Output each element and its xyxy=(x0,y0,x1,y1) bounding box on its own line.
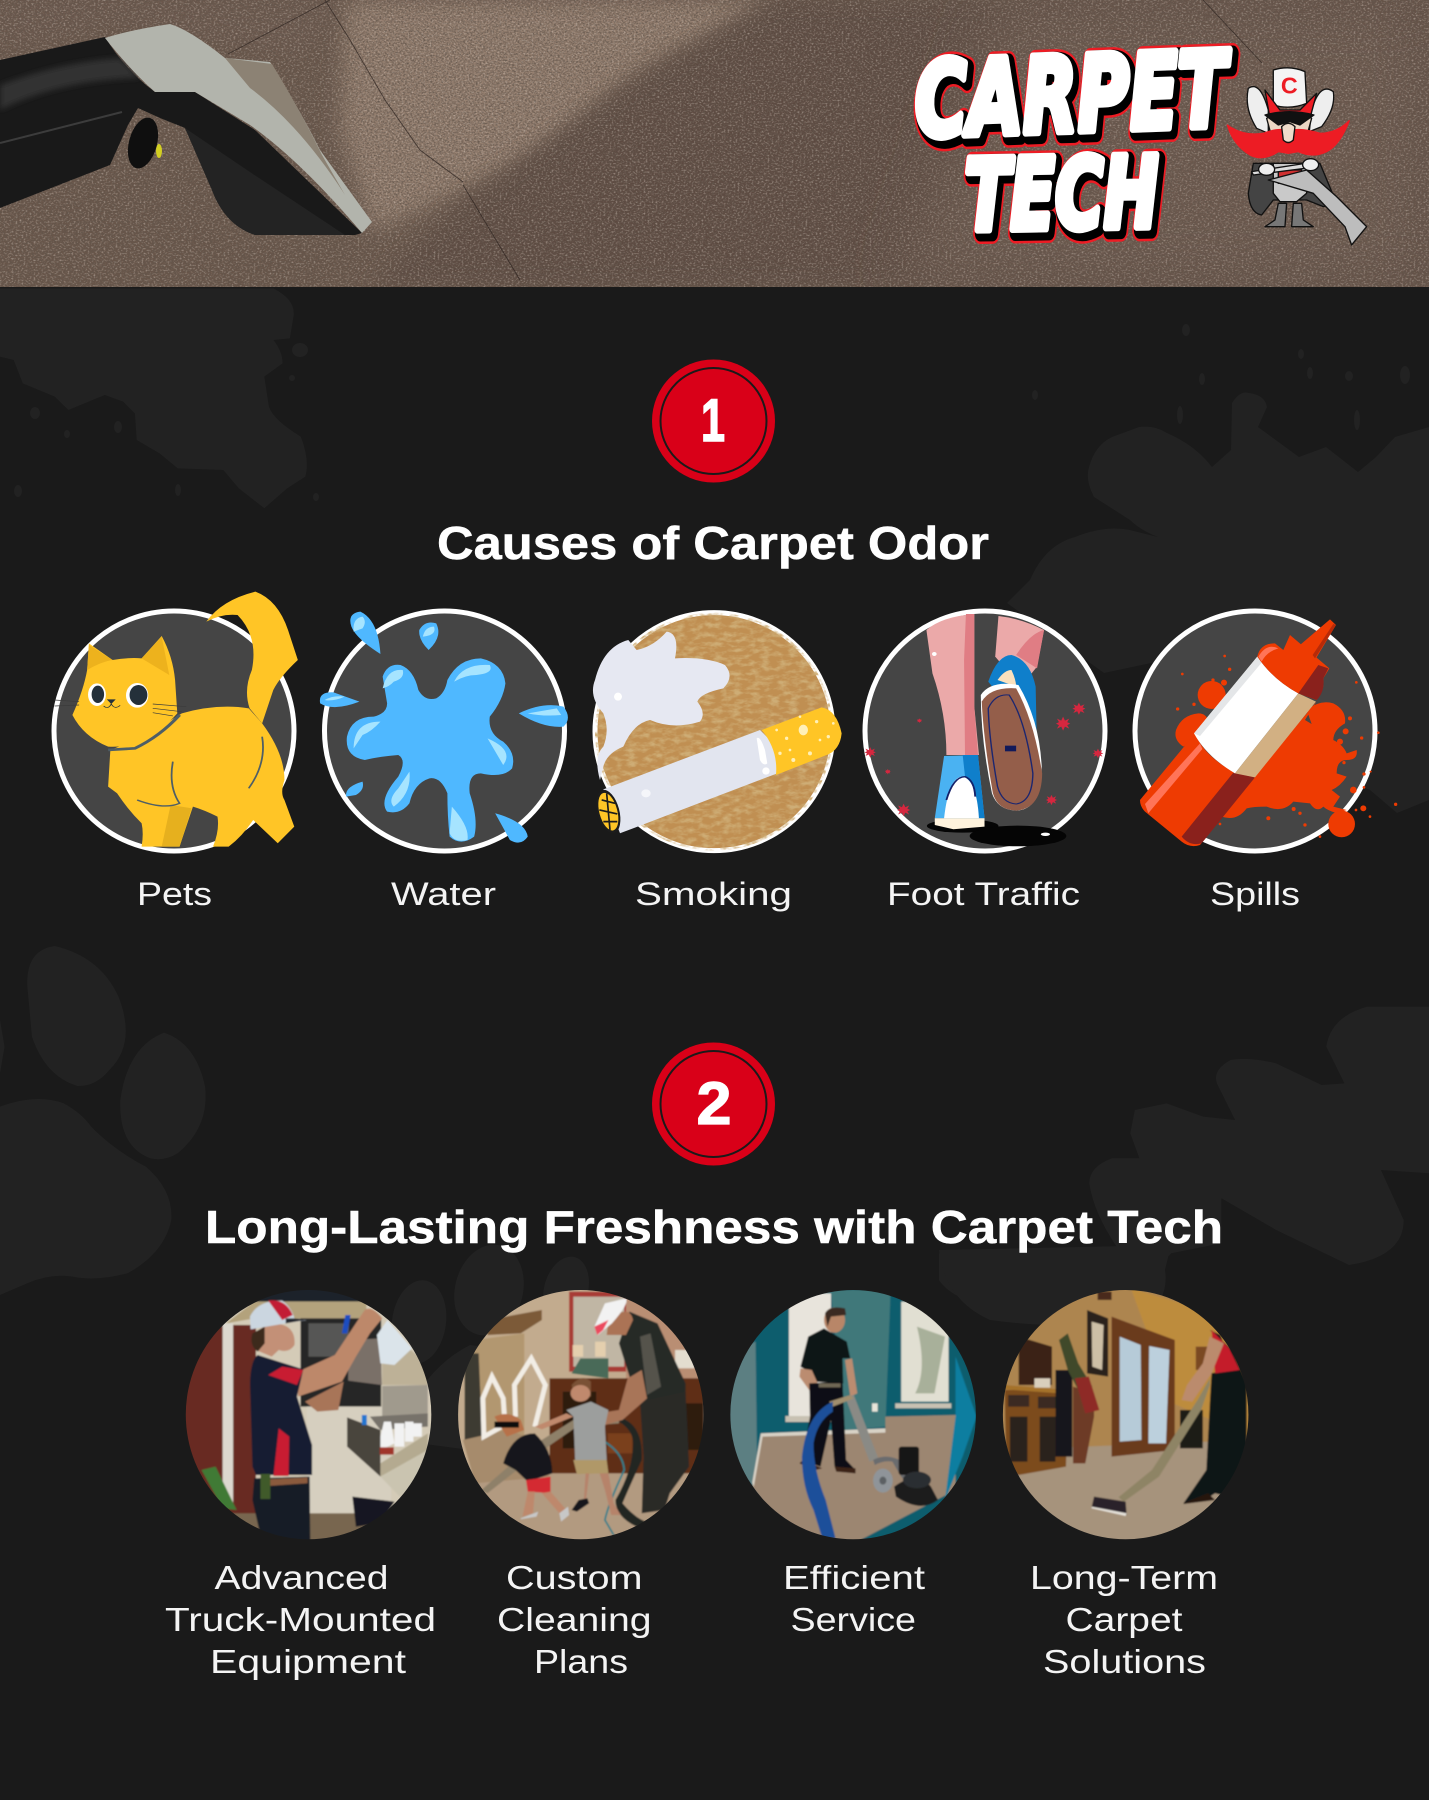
panel: long-term carpet solutions xyxy=(1001,1288,1250,1680)
panel: truck-mounted equipment xyxy=(165,1288,436,1680)
logo: Carpet Tech wordmark: TECH xyxy=(967,140,1163,258)
photo: technician with rotary carpet machine xyxy=(729,1288,978,1542)
photo: technician at truck-mounted equipment xyxy=(184,1288,433,1543)
photo: technician cleaning with children xyxy=(458,1288,705,1542)
label: Advanced Truck-Mounted Equipment: Advanced xyxy=(214,1559,388,1596)
icon: ketchup bottle and splatter xyxy=(1140,619,1397,846)
label: Efficient Service: Service xyxy=(790,1601,916,1638)
panel: smoking xyxy=(592,612,842,912)
icon: walking legs and shoes xyxy=(865,614,1103,846)
carpet seams xyxy=(228,0,1262,280)
label: Custom Cleaning Plans: Plans xyxy=(534,1643,628,1680)
logo: Carpet Tech wordmark xyxy=(913,28,1237,258)
label: Water: Water xyxy=(391,876,496,912)
label: Advanced Truck-Mounted Equipment: Truck-Mounted xyxy=(165,1601,436,1638)
panel: efficient service xyxy=(729,1288,978,1638)
panel: spills xyxy=(1135,611,1397,912)
logo: mascot with wand xyxy=(1227,68,1367,245)
label: Custom Cleaning Plans: Cleaning xyxy=(497,1601,652,1638)
label: Long-Term Carpet Solutions: Carpet xyxy=(1066,1601,1182,1638)
label: Advanced Truck-Mounted Equipment: Equipment xyxy=(210,1643,406,1680)
logo: Carpet Tech wordmark: TECH xyxy=(967,140,1163,258)
icon: cigarette and smoke xyxy=(592,632,842,836)
label: Pets: Pets xyxy=(137,876,212,912)
logo: Carpet Tech wordmark: CARPET xyxy=(916,32,1237,165)
label: Foot Traffic: Foot Traffic xyxy=(887,876,1080,912)
circle: pets xyxy=(54,611,294,851)
background splatters and paw prints xyxy=(0,288,1429,1450)
circle: spills xyxy=(1135,611,1375,851)
label: Long-Term Carpet Solutions xyxy=(1030,1559,1218,1680)
label: Efficient Service: Efficient xyxy=(783,1559,925,1596)
badge: number 2: 2 xyxy=(696,1070,732,1137)
heading: Long-Lasting Freshness with Carpet Tech: Long-Lasting Freshness with Carpet Tech xyxy=(205,1201,1223,1253)
header carpet photo xyxy=(0,0,1429,287)
label: Advanced Truck-Mounted Equipment xyxy=(165,1559,436,1680)
icon: yellow cat xyxy=(55,592,298,847)
badge: number 1 xyxy=(652,360,775,482)
circle: water xyxy=(324,611,564,851)
panel: water xyxy=(320,611,568,912)
label: Spills: Spills xyxy=(1210,876,1300,912)
heading: Causes of Carpet Odor: Causes of Carpet Odor xyxy=(437,517,989,569)
hose connector xyxy=(128,118,158,168)
label: Efficient Service xyxy=(783,1559,925,1638)
photo: wand cleaning carpet in a living room xyxy=(1001,1288,1250,1542)
logo: Carpet Tech wordmark: TECH xyxy=(964,136,1160,254)
logo: Carpet Tech wordmark: CARPET xyxy=(916,32,1237,165)
logo: Carpet Tech wordmark: CARPET xyxy=(913,28,1234,161)
icon: water splash xyxy=(320,612,568,843)
badge: number 1: 1 xyxy=(701,387,725,454)
panel: foot traffic xyxy=(865,611,1105,912)
circle: smoking xyxy=(593,612,835,853)
badge: number 2 xyxy=(652,1042,775,1166)
label: Custom Cleaning Plans xyxy=(497,1559,652,1680)
logo: mascot with wand: C xyxy=(1281,72,1298,98)
label: Smoking: Smoking xyxy=(635,876,792,912)
label: Custom Cleaning Plans: Custom xyxy=(506,1559,642,1596)
panel: pets xyxy=(54,592,298,912)
label: Long-Term Carpet Solutions: Long-Term xyxy=(1030,1559,1218,1596)
carpet cleaning wand xyxy=(0,24,372,235)
circle: foot traffic xyxy=(865,611,1105,851)
label: Long-Term Carpet Solutions: Solutions xyxy=(1043,1643,1206,1680)
cleaner strip on carpet xyxy=(340,0,775,232)
panel: custom cleaning plans xyxy=(458,1288,705,1680)
